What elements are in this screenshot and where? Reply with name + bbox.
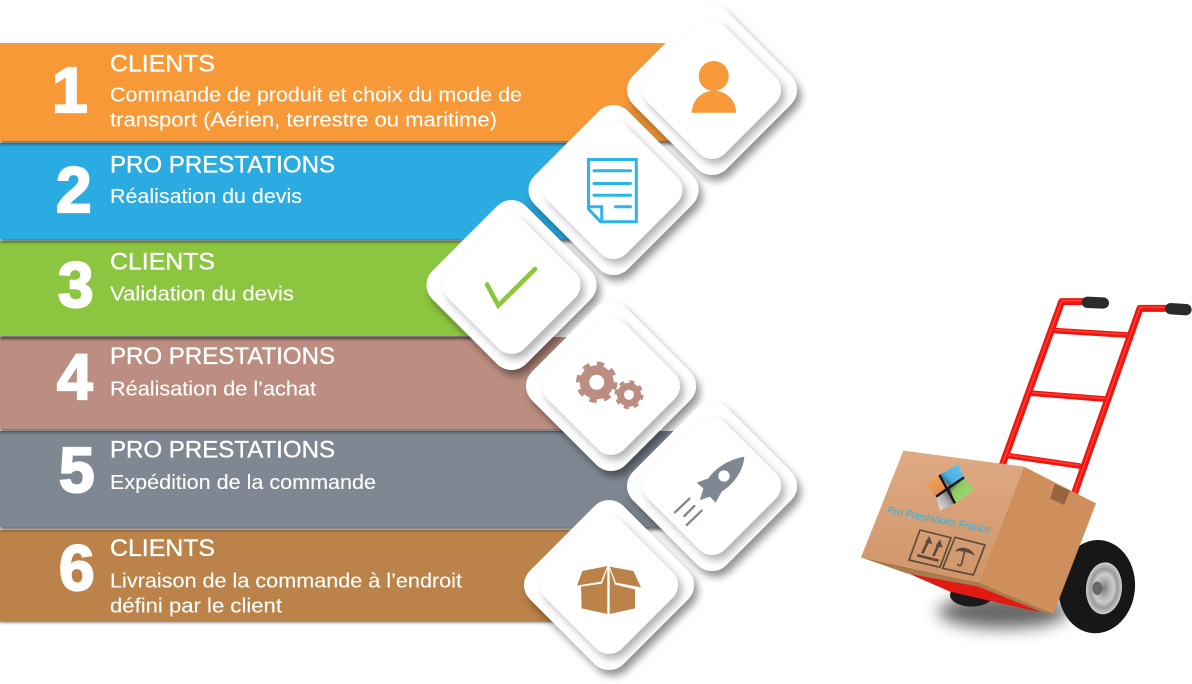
step 4 text: Réalisation de l’achat [110, 378, 316, 400]
bar 3 [0, 241, 500, 336]
icon: document [588, 160, 636, 222]
truck base plate [908, 573, 1042, 613]
step 2 text: Réalisation du devis [110, 185, 302, 208]
rear wheel [950, 583, 993, 607]
bar 1 [0, 43, 680, 141]
step 3 text: Validation du devis [110, 282, 294, 306]
tape [1050, 484, 1070, 505]
diamond 5: rocket icon [619, 393, 805, 579]
icon: check mark [487, 269, 535, 306]
step 5 text: Expédition de la commande [110, 471, 376, 494]
step 1 text: 1 [52, 54, 88, 126]
step 3 text: CLIENTS [110, 248, 215, 276]
handle grips [1087, 302, 1186, 310]
step 6 text: CLIENTS [110, 535, 215, 562]
box underside flap [861, 557, 1053, 614]
step 1 text: transport (Aérien, terrestre ou maritime) [110, 108, 497, 132]
diamond 3: check icon [418, 192, 605, 378]
front wheel [1054, 537, 1139, 636]
logo caption: Pro Prestations France [886, 504, 991, 536]
step 6 text: défini par le client [110, 594, 282, 618]
step 1 text [52, 50, 522, 132]
diamond 6: box icon [516, 492, 702, 678]
bar 2 [0, 143, 590, 239]
icon: open box [577, 566, 641, 614]
step 5 text [59, 434, 376, 506]
step 1 text: Commande de produit et choix du mode de [110, 84, 522, 106]
hand truck with box [861, 301, 1186, 636]
bar 6 [0, 530, 590, 622]
step 4 text: 4 [57, 341, 93, 413]
box right face [978, 467, 1096, 614]
step 1 text: CLIENTS [110, 50, 215, 78]
step 5 text: 5 [59, 434, 95, 506]
bar 4 [0, 337, 590, 429]
diamond 2: document icon [520, 97, 707, 283]
step 3 text [58, 248, 294, 321]
handling symbols [909, 530, 985, 575]
frame [1002, 301, 1186, 497]
icon: rocket [675, 457, 744, 525]
step 2 text [56, 152, 335, 226]
diamond 4: gears icon [518, 293, 704, 479]
step 2 text: 2 [56, 154, 92, 226]
step bars [0, 43, 680, 622]
diamond 1: client icon [619, 0, 805, 183]
box front face [861, 451, 1024, 583]
step 2 text: PRO PRESTATIONS [110, 152, 335, 178]
step 4 text [57, 341, 335, 413]
logo [926, 464, 974, 511]
step 4 text: PRO PRESTATIONS [110, 343, 335, 370]
step 6 text [59, 532, 462, 618]
step 3 text: 3 [58, 249, 94, 321]
step 6 text: Livraison de la commande à l’endroit [110, 570, 462, 592]
icon: person [692, 61, 736, 113]
step 6 text: 6 [59, 532, 95, 604]
step 5 text: PRO PRESTATIONS [110, 436, 335, 464]
ground shadow [938, 595, 1068, 628]
icon: gears [578, 364, 642, 408]
bar 5 [0, 431, 677, 527]
